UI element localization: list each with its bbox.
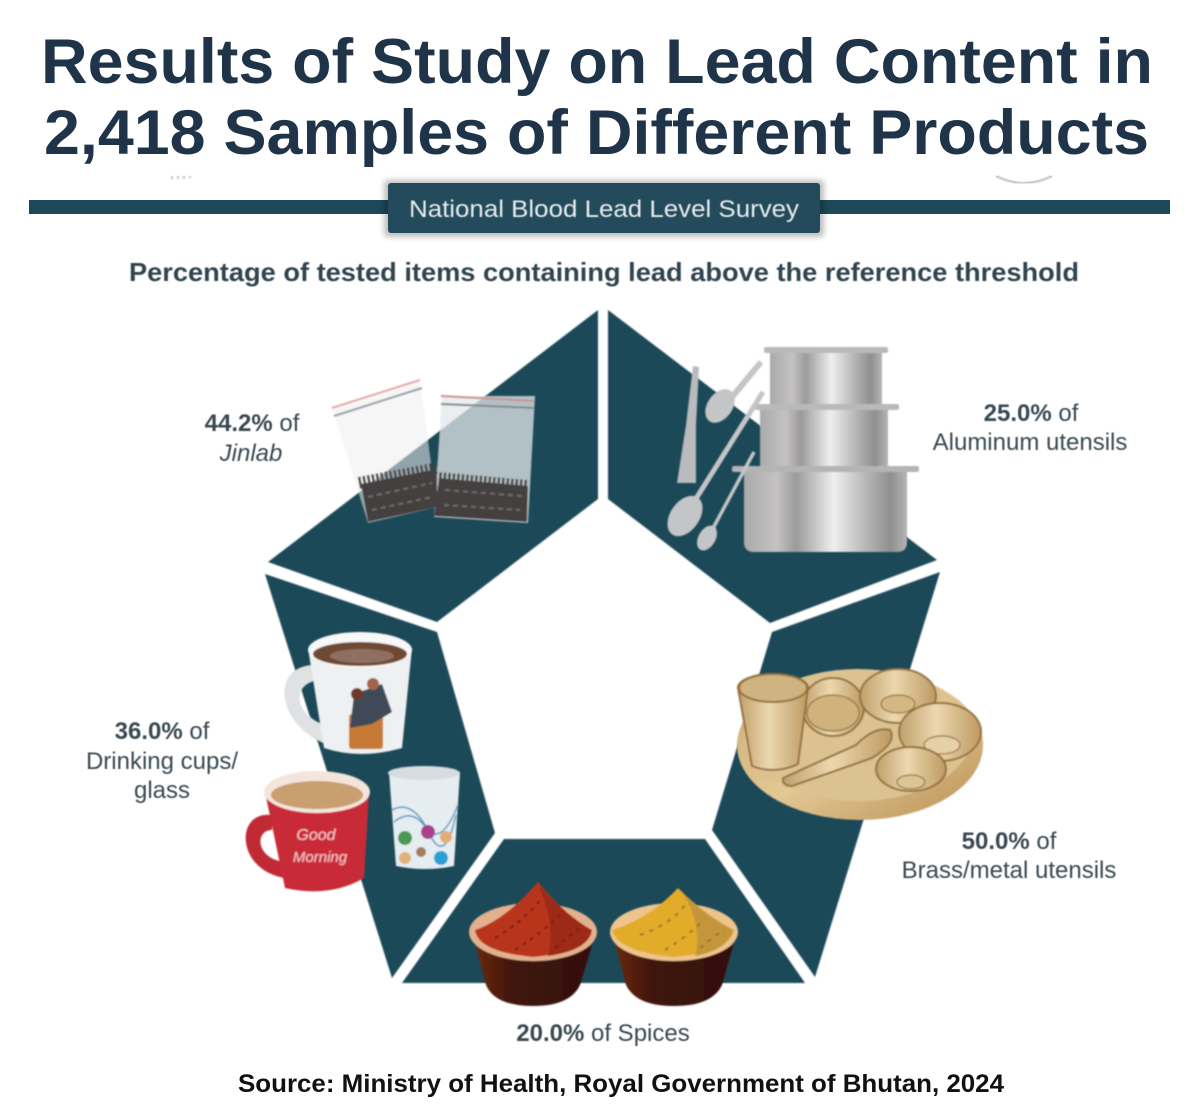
label: drinking cups (86, 718, 238, 804)
title: Results of Study on Lead Content in (41, 27, 1153, 97)
dark contents (361, 469, 437, 522)
title (41, 27, 1153, 168)
red mug (246, 771, 370, 891)
red spice bowl (469, 882, 597, 1006)
source: Source: Ministry of Health, Royal Government of Bhutan, 2024 (238, 1070, 1004, 1098)
survey banner: National Blood Lead Level Survey (409, 196, 799, 223)
icon: jinlab bags (332, 380, 535, 523)
mug lettering: Good (296, 827, 337, 844)
label: drinking cups: 36.0% of (115, 718, 210, 745)
label: spices: 20.0% of Spices (516, 1020, 690, 1047)
label: brass utensils: Brass/metal utensils (902, 857, 1116, 884)
ladles (661, 362, 763, 553)
spatula (677, 366, 699, 483)
white mug (284, 632, 412, 754)
icon: cups and glass (246, 632, 460, 891)
pots (732, 347, 919, 552)
label: aluminum utensils: 25.0% of (984, 400, 1079, 427)
label: jinlab: 44.2% of (205, 410, 300, 437)
subtitle: Percentage of tested items containing lead above the reference threshold (129, 257, 1079, 287)
title: 2,418 Samples of Different Products (44, 98, 1149, 168)
cropped logo remnants (172, 176, 1052, 183)
label: aluminum utensils (933, 400, 1127, 456)
label: drinking cups: Drinking cups/ (86, 748, 238, 775)
label: jinlab (205, 410, 300, 467)
label: drinking cups: glass (134, 777, 190, 804)
label: aluminum utensils: Aluminum utensils (933, 429, 1127, 456)
label: brass utensils (902, 828, 1116, 884)
label: brass utensils: 50.0% of (962, 828, 1057, 855)
pentagon segments (265, 310, 940, 983)
icon: brass plate (737, 669, 983, 820)
glass (388, 766, 460, 869)
zip lines (332, 380, 534, 416)
yellow spice bowl (610, 888, 738, 1006)
mug figures (349, 714, 383, 749)
icon: aluminum utensils (661, 347, 919, 553)
red mug: Morning (293, 849, 348, 866)
label: jinlab: Jinlab (219, 440, 282, 467)
icon: spice bowls (469, 882, 738, 1006)
survey banner (29, 180, 1170, 237)
